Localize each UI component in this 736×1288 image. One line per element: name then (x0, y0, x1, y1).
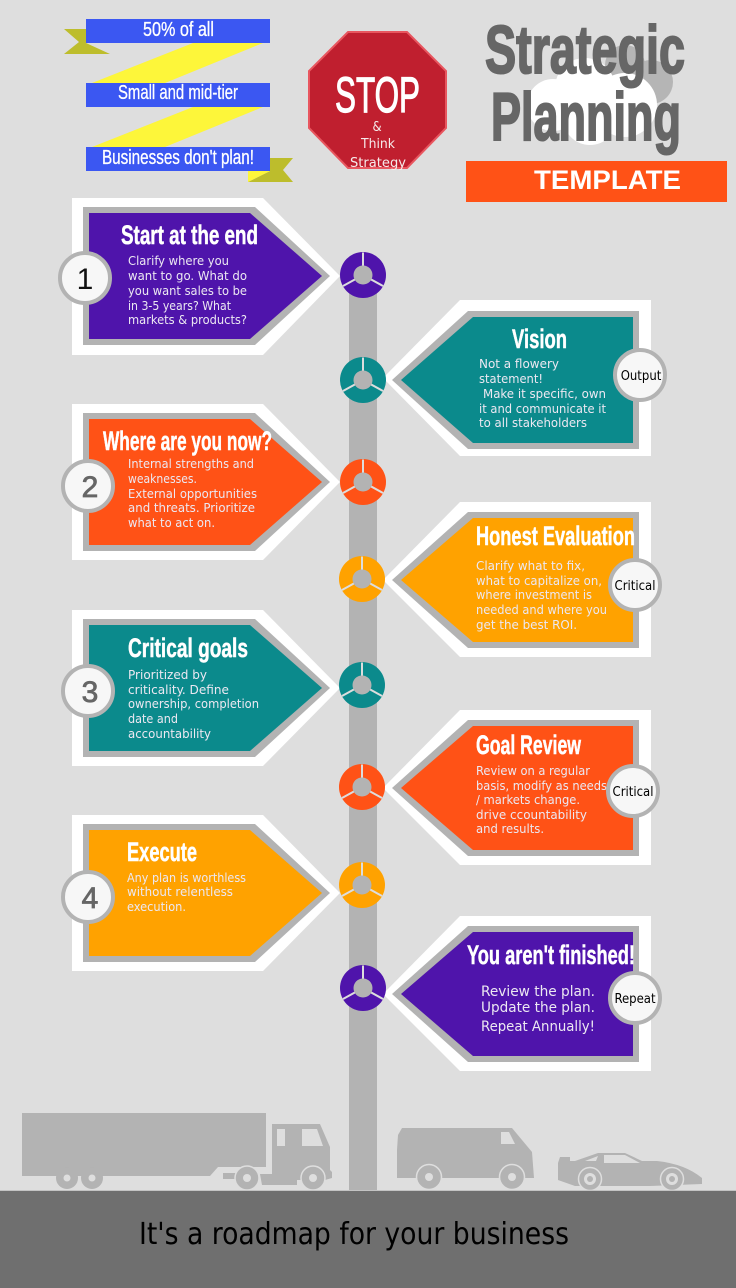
card 1: start at the end: 1 (77, 263, 93, 296)
footer bar: It's a roadmap for your business (139, 1217, 569, 1252)
node: amber (339, 862, 385, 908)
stop sign: STOP (335, 67, 420, 123)
card 1: start at the end: want to go. What do (128, 268, 247, 283)
card 3: critical goals: accountability (128, 726, 211, 741)
card 4: execute (63, 815, 340, 971)
card: honest evaluation: Critical (615, 579, 655, 594)
icon: van (397, 1128, 534, 1190)
card 1: start at the end: Clarify where you (128, 253, 229, 268)
card: honest evaluation: where investment is (476, 587, 592, 602)
card: you aren't finished (383, 916, 660, 1071)
card: vision: Make it specific, own (483, 386, 606, 401)
card: goal review: / markets change. (476, 792, 580, 807)
card: honest evaluation (383, 502, 660, 657)
stop sign: Strategy (350, 156, 406, 171)
card: goal review: Critical (613, 785, 653, 800)
card 1: start at the end (60, 198, 340, 355)
node: purple (340, 252, 386, 298)
card 4: execute: Execute (127, 837, 197, 867)
template banner: TEMPLATE (534, 165, 681, 195)
card: vision: statement! (479, 371, 543, 386)
card 1: start at the end: markets & products? (128, 312, 247, 327)
card 2: where are you now (63, 404, 340, 560)
card 4: execute: without relentless (127, 884, 233, 899)
card 3: critical goals: 3 (82, 676, 98, 709)
card: goal review: Goal Review (476, 730, 582, 760)
card 4: execute: Any plan is worthless (127, 870, 246, 885)
card 4: execute: 4 (82, 882, 98, 915)
card: goal review (383, 710, 658, 865)
card: you aren't finished: Repeat Annually! (481, 1019, 595, 1035)
stop sign: & (372, 120, 382, 135)
node: orange-red (339, 764, 385, 810)
node: amber (339, 556, 385, 602)
card 3: critical goals: ownership, completion (128, 696, 259, 711)
card: you aren't finished: Review the plan. (481, 984, 595, 1000)
footer bar (0, 1190, 736, 1288)
node: teal (339, 662, 385, 708)
banner: 50% of all small and mid-tier businesses don't plan (64, 19, 293, 182)
card: you aren't finished: You aren't finished! (467, 940, 635, 970)
banner: 50% of all small and mid-tier businesses don't plan: Small and mid-tier (118, 82, 238, 104)
card: goal review: basis, modify as needs (476, 778, 607, 793)
card 2: where are you now: Internal strengths and (128, 456, 254, 471)
card: vision (383, 300, 665, 456)
card 3: critical goals: criticality. Define (128, 682, 229, 697)
card: you aren't finished: Update the plan. (481, 1000, 595, 1016)
card 1: start at the end: you want sales to be (128, 283, 247, 298)
icon: truck (22, 1113, 332, 1190)
card: honest evaluation: what to capitalize on, (476, 573, 602, 588)
card 4: execute: execution. (127, 899, 186, 914)
card: honest evaluation: Clarify what to fix, (476, 558, 585, 573)
card 3: critical goals: date and (128, 711, 178, 726)
card: vision: Not a flowery (479, 356, 559, 371)
card 1: start at the end: Start at the end (121, 220, 258, 250)
roadmap pole (349, 275, 377, 1191)
card: goal review: Review on a regular (476, 763, 590, 778)
template banner (466, 161, 727, 202)
banner: 50% of all small and mid-tier businesses don't plan: Businesses don't plan! (102, 147, 254, 169)
card: you aren't finished: Repeat (614, 992, 656, 1007)
card: goal review: drive ccountability (476, 807, 587, 822)
title with cloud (485, 12, 685, 155)
node: orange-red (340, 459, 386, 505)
stop sign (309, 32, 446, 171)
card: vision: to all stakeholders (479, 415, 587, 430)
card: vision: Output (621, 369, 662, 384)
banner: 50% of all small and mid-tier businesses don't plan: 50% of all (143, 19, 214, 41)
card 3: critical goals: Prioritized by (128, 667, 207, 682)
card 2: where are you now: weaknesses. (128, 471, 197, 486)
node: teal (340, 357, 386, 403)
node: purple (340, 965, 386, 1011)
card 3: critical goals (63, 610, 340, 766)
card: vision: Vision (512, 324, 567, 354)
card 2: where are you now: what to act on. (128, 515, 215, 530)
card: honest evaluation: Honest Evaluation (476, 521, 635, 551)
icon: sports car (558, 1153, 702, 1190)
card 2: where are you now: Where are you now? (103, 426, 272, 456)
card: honest evaluation: needed and where you (476, 602, 607, 617)
card 2: where are you now: External opportunities (128, 486, 257, 501)
card 2: where are you now: 2 (82, 471, 98, 504)
card 2: where are you now: and threats. Prioritize (128, 500, 255, 515)
card: honest evaluation: get the best ROI. (476, 617, 577, 632)
card: vision: it and communicate it (479, 401, 607, 416)
card 1: start at the end: in 3-5 years? What (128, 298, 232, 313)
card: goal review: and results. (476, 821, 544, 836)
stop sign: Think (360, 137, 395, 152)
card 3: critical goals: Critical goals (128, 633, 248, 663)
